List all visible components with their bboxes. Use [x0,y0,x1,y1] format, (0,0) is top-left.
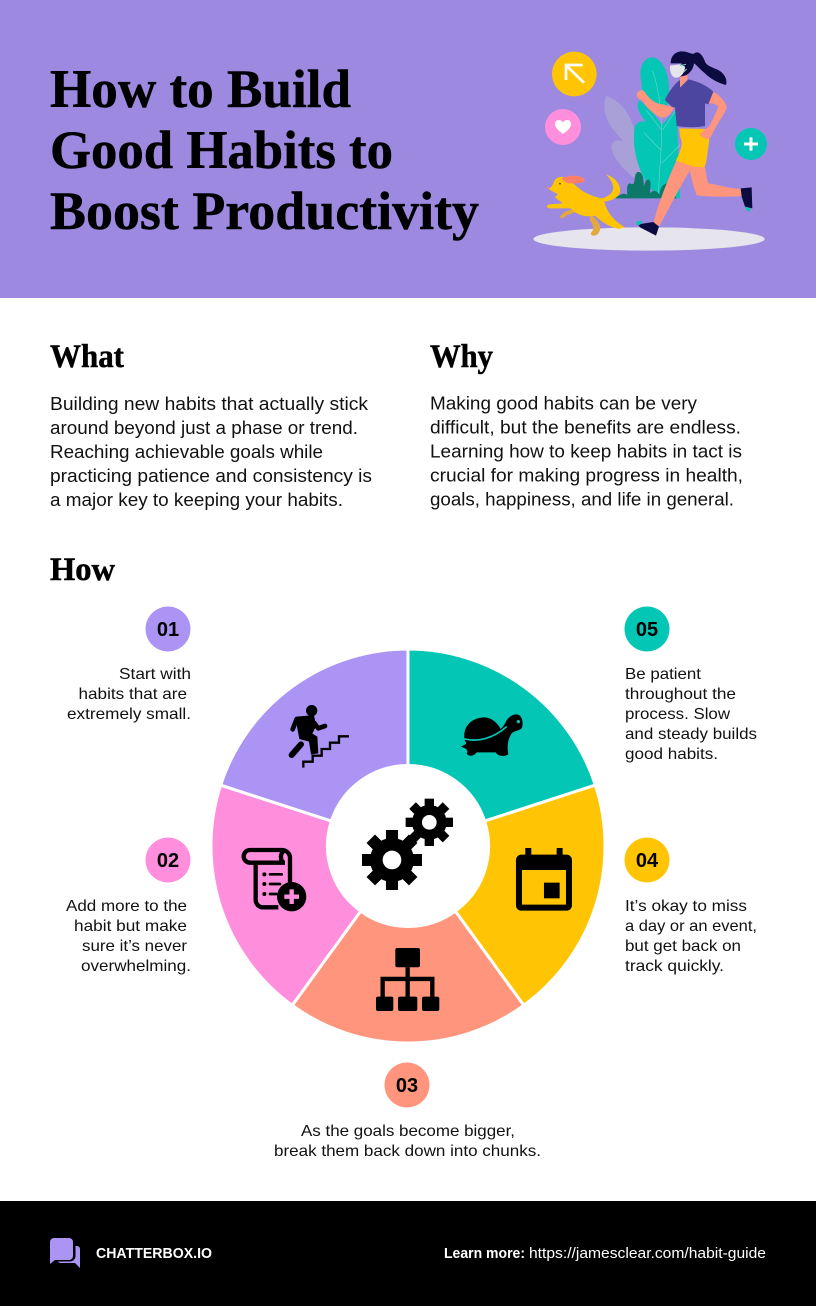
title: Good Habits to [50,120,393,180]
step 04: a day or an event, [625,918,757,935]
text: why body: Learning how to keep habits in tact is [430,442,742,462]
section: why [430,339,743,510]
dog [547,174,625,236]
source link [444,1246,766,1262]
text: what body: around beyond just a phase or trend. [50,418,358,438]
segment: 05 teal [408,649,595,821]
step 05 [624,606,757,763]
text: what body: practicing patience and consistency is [50,466,372,486]
step 01: extremely small. [67,706,191,723]
step 02: overwhelming. [81,958,191,975]
heading: how: How [50,552,115,588]
woman upper body [637,51,727,139]
text: why body: crucial for making progress in health, [430,466,743,486]
text: what body [50,394,372,510]
step 02: Add more to the [66,898,187,915]
step 02: sure it’s never [82,938,188,955]
step 01: 01 [157,619,179,641]
segment: 02 pink [211,785,361,1005]
step 04: 04 [636,850,659,872]
footer [0,1201,816,1306]
text: what body: Reaching achievable goals while [50,442,323,462]
step 05: Be patient [625,666,702,683]
step 04: track quickly. [625,958,724,975]
woman legs and shoes [636,128,752,236]
icon: arrow badge [552,52,597,96]
icon: chat bubbles logo [50,1238,80,1268]
step 05: and steady builds [625,726,757,743]
icon: plus badge [735,128,767,160]
step 05: 05 [636,619,658,641]
step 03: 03 [396,1075,418,1097]
icon: hierarchy chart [376,948,439,1011]
step 05: process. Slow [625,706,730,723]
icon: calendar [516,848,572,911]
step 01: Start with [119,666,191,683]
header panel [0,0,816,298]
step 02: 02 [157,850,179,872]
icon: gears [362,799,453,890]
step 02 [66,838,191,975]
badges and plants [533,52,767,251]
icon: heart badge [545,109,581,145]
plants [604,57,680,198]
section: what [50,339,372,510]
step 03: As the goals become bigger, [301,1123,515,1140]
source link: https://jamesclear.com/habit-guide [529,1246,766,1262]
wheel diagram [211,649,605,1043]
text: what body: a major key to keeping your habits. [50,490,343,510]
segment: 04 yellow [455,785,605,1005]
step 05: throughout the [625,686,736,703]
heading: why: Why [430,339,493,375]
text: why body: difficult, but the benefits are endless. [430,418,741,438]
step 05: good habits. [625,746,718,763]
ground shadow [533,227,765,251]
text: why body: goals, happiness, and life in general. [430,490,734,510]
step 03: break them back down into chunks. [274,1143,541,1160]
segment: 03 coral [292,911,524,1043]
text: what body: Building new habits that actually stick [50,394,369,414]
title: How to Build [50,59,351,119]
segment: 01 purple [221,649,408,821]
step 01: habits that are [78,686,187,703]
illustration: woman running with dog [533,51,767,251]
title: Boost Productivity [50,181,479,241]
step 03 [274,1062,541,1160]
icon: turtle [461,714,523,756]
other wheel icons [362,799,572,1011]
title [50,59,479,241]
heading: what: What [50,339,124,375]
source link: Learn more: [444,1246,525,1262]
icon: person climbing stairs [292,705,349,768]
step 04: but get back on [625,938,741,955]
step 04 [624,838,757,975]
step 01 [67,606,191,723]
step 02: habit but make [74,918,187,935]
text: why body [430,394,743,510]
step 04: It’s okay to miss [625,898,747,915]
text: why body: Making good habits can be very [430,394,697,414]
brand name: CHATTERBOX.IO [96,1246,212,1262]
icon: list scroll with plus [244,850,306,911]
